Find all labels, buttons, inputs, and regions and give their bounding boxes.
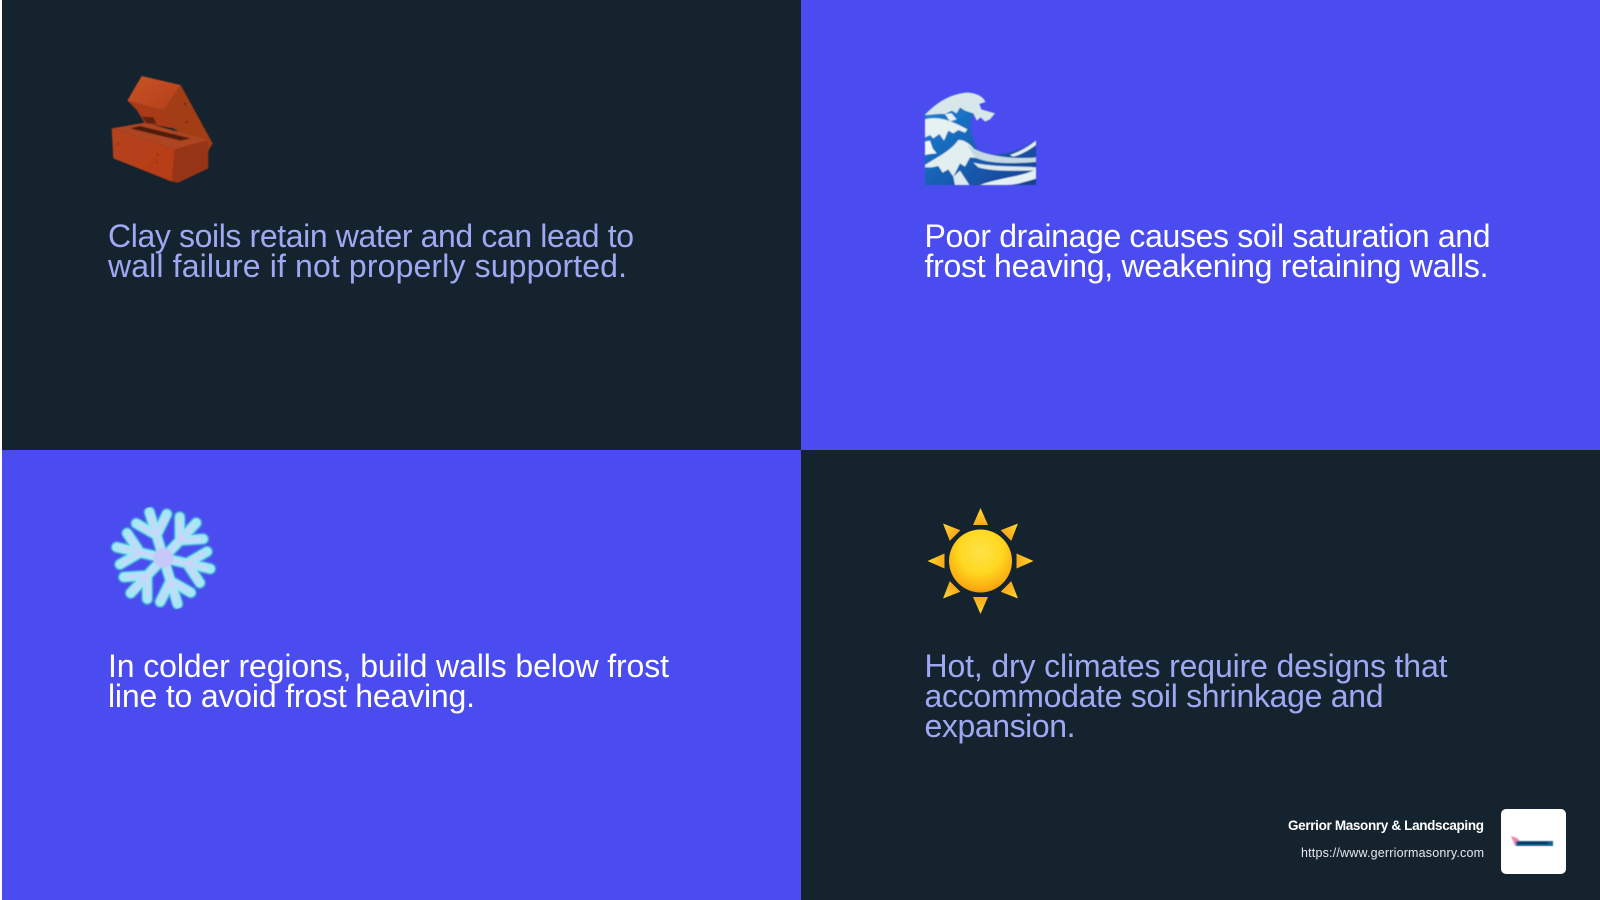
footer: company name and url: https://www.gerriormasonry.com: [1301, 846, 1484, 860]
icon: sun: [928, 508, 1034, 614]
text: poor drainage: frost heaving, weakening retaining walls.: [924, 248, 1488, 284]
text: clay soils: wall failure if not properly supported.: [107, 248, 627, 284]
panel: colder regions: [2, 450, 801, 900]
text: hot dry climates: [924, 648, 1448, 744]
text: clay soils: Clay soils retain water and can lead to: [108, 218, 634, 254]
text: colder regions: [108, 648, 669, 714]
footer: company name and url: Gerrior Masonry & Landscaping: [1288, 818, 1484, 833]
text: colder regions: In colder regions, build walls below frost: [108, 648, 669, 684]
icon: bricks: [112, 76, 213, 183]
footer: company name and url: [1288, 818, 1484, 860]
text: colder regions: line to avoid frost heaving.: [108, 678, 475, 714]
icon: wave: [925, 93, 1036, 185]
icon: snowflake: [102, 498, 225, 618]
text: hot dry climates: accommodate soil shrinkage and: [924, 678, 1384, 714]
panel: clay soils: [2, 0, 801, 450]
text: poor drainage: Poor drainage causes soil saturation and: [924, 218, 1490, 254]
text: hot dry climates: Hot, dry climates require designs that: [924, 648, 1448, 684]
text: hot dry climates: expansion.: [924, 708, 1076, 744]
logo: [1501, 809, 1566, 874]
panel: poor drainage: [801, 0, 1600, 450]
panel: hot dry climates: [801, 450, 1600, 900]
text: clay soils: [107, 218, 634, 284]
text: poor drainage: [924, 218, 1490, 284]
